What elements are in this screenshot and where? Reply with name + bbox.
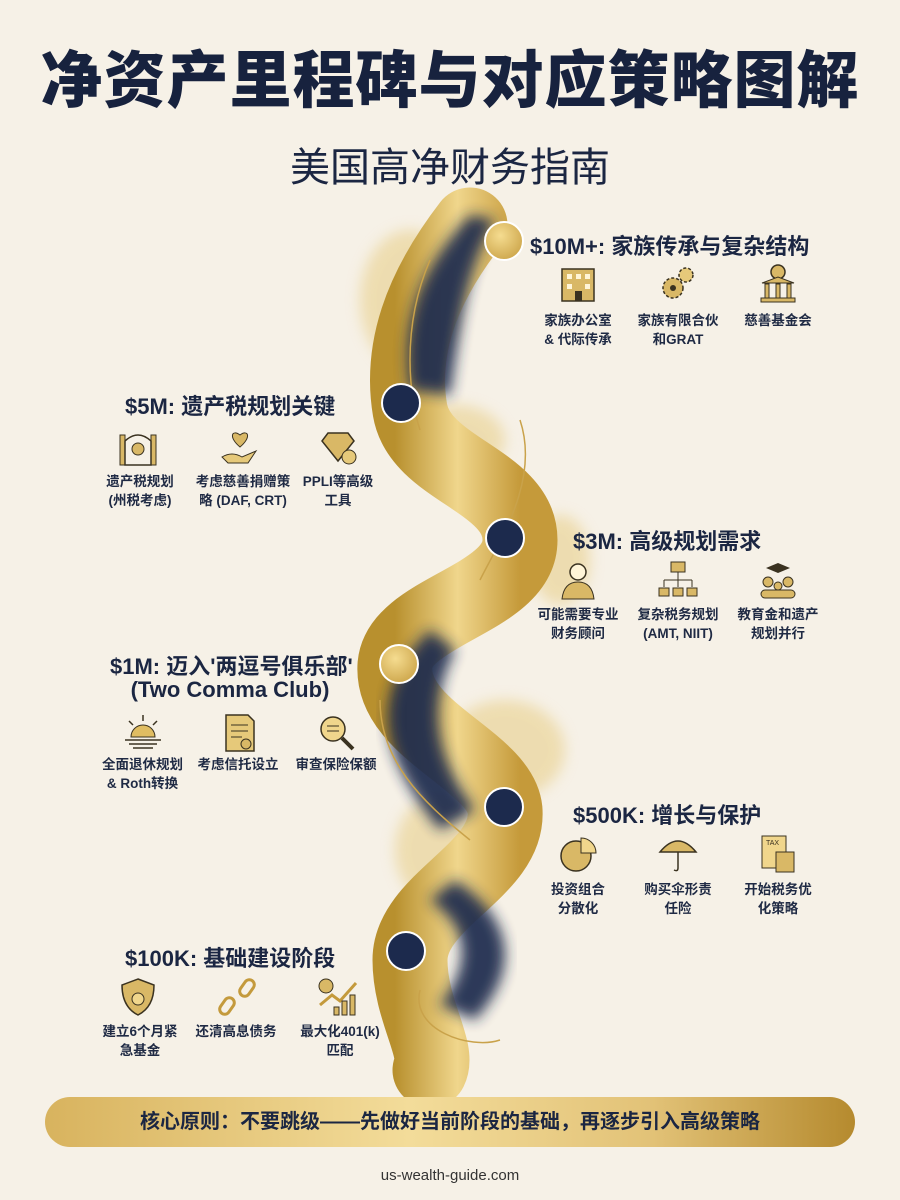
label: 财务顾问 xyxy=(551,626,605,641)
label xyxy=(300,1024,380,1058)
callout: core principle banner xyxy=(45,1097,855,1147)
icon: certificate xyxy=(225,714,255,752)
label xyxy=(544,313,612,347)
label xyxy=(102,1024,178,1058)
label: 匹配 xyxy=(326,1043,354,1058)
icon: growth chart xyxy=(318,978,357,1016)
label: 考虑信托设立 xyxy=(198,757,278,772)
label: 审查保险保额 xyxy=(296,757,376,772)
icon: umbrella xyxy=(658,840,698,872)
label xyxy=(738,607,818,641)
label: 家族有限合伙 xyxy=(638,313,718,328)
heading 1M: $1M: 迈入'两逗号俱乐部' xyxy=(110,654,353,679)
icon: pie chart xyxy=(560,838,596,872)
icon: gears xyxy=(662,267,694,299)
label: 家族办公室 xyxy=(544,313,612,328)
milestone dot: 5M xyxy=(381,383,421,423)
label xyxy=(303,474,373,508)
icon: advisor xyxy=(561,563,594,600)
label xyxy=(106,474,174,508)
icon: org chart xyxy=(658,562,698,596)
icon: tax calculator: TAX xyxy=(766,840,779,847)
panel: 5M xyxy=(106,394,373,508)
icon: sunset xyxy=(125,715,161,749)
heading 3M: $3M: 高级规划需求 xyxy=(573,529,761,554)
label xyxy=(644,882,712,916)
title: 净资产里程碑与对应策略图解 xyxy=(40,47,860,116)
label: 购买伞形责 xyxy=(644,882,712,897)
label: (州税考虑) xyxy=(108,493,172,508)
heading 500K: $500K: 增长与保护 xyxy=(573,803,761,828)
heading 5M: $5M: 遗产税规划关键 xyxy=(125,394,335,419)
label: 全面退休规划 xyxy=(102,757,183,772)
label: 慈善基金会 xyxy=(744,313,812,328)
label: & Roth转换 xyxy=(107,776,178,791)
label: 任险 xyxy=(664,901,692,916)
label: (AMT, NIIT) xyxy=(643,626,713,641)
label: 建立6个月紧 xyxy=(102,1024,178,1039)
milestone dot: 100K xyxy=(386,931,426,971)
label xyxy=(102,757,183,791)
label xyxy=(638,313,718,347)
label: 略 (DAF, CRT) xyxy=(199,493,287,508)
label: PPLI等高级 xyxy=(303,474,373,489)
label xyxy=(638,607,718,641)
label: 分散化 xyxy=(558,901,598,916)
label: 规划并行 xyxy=(751,626,805,641)
label: 开始税务优 xyxy=(744,882,812,897)
label: 还清高息债务 xyxy=(196,1024,276,1039)
label: 工具 xyxy=(324,493,352,508)
icon: tax calculator xyxy=(762,836,794,872)
panel: 10M+ xyxy=(530,234,812,347)
icon: graduation family xyxy=(760,563,796,598)
panel: 3M xyxy=(538,529,818,641)
icon: shield money xyxy=(121,978,155,1016)
label: 投资组合 xyxy=(551,882,605,897)
label xyxy=(538,607,618,641)
label xyxy=(196,474,290,508)
label xyxy=(744,882,812,916)
panel: 1M xyxy=(102,654,376,791)
label: & 代际传承 xyxy=(544,332,612,347)
milestone dot: 1M xyxy=(379,644,419,684)
panel: 500K xyxy=(551,803,812,916)
icon: gate xyxy=(120,434,156,466)
heading 1M second line: (Two Comma Club) xyxy=(131,677,329,702)
icon: broken chain xyxy=(218,978,256,1016)
label: 化策略 xyxy=(758,901,798,916)
label: 考虑慈善捐赠策 xyxy=(196,474,290,489)
icon: heart hand xyxy=(221,432,258,464)
label: 和GRAT xyxy=(653,332,703,347)
icon: magnifier xyxy=(320,716,354,750)
label: 教育金和遗产 xyxy=(738,607,818,622)
subtitle: 美国高净财务指南 xyxy=(290,146,610,190)
heading 100K: $100K: 基础建设阶段 xyxy=(125,946,335,971)
label xyxy=(551,882,605,916)
footer: us-wealth-guide.com xyxy=(381,1167,519,1184)
label: 最大化401(k) xyxy=(300,1024,380,1039)
icon: diamond xyxy=(321,432,356,464)
heading 10M: $10M+: 家族传承与复杂结构 xyxy=(530,234,809,259)
label: 可能需要专业 xyxy=(538,607,618,622)
label: 遗产税规划 xyxy=(106,474,174,489)
callout: core principle banner: 核心原则：不要跳级——先做好当前阶段的基础，再逐步引入高级策略 xyxy=(140,1111,760,1133)
label: 复杂税务规划 xyxy=(638,607,718,622)
milestone dot: 3M xyxy=(485,518,525,558)
panel: 100K xyxy=(102,946,380,1058)
icon: building xyxy=(561,268,595,302)
label: 急基金 xyxy=(120,1043,160,1058)
milestone dot: 10M xyxy=(484,221,524,261)
milestone dot: 500K xyxy=(484,787,524,827)
icon: foundation xyxy=(760,264,796,302)
